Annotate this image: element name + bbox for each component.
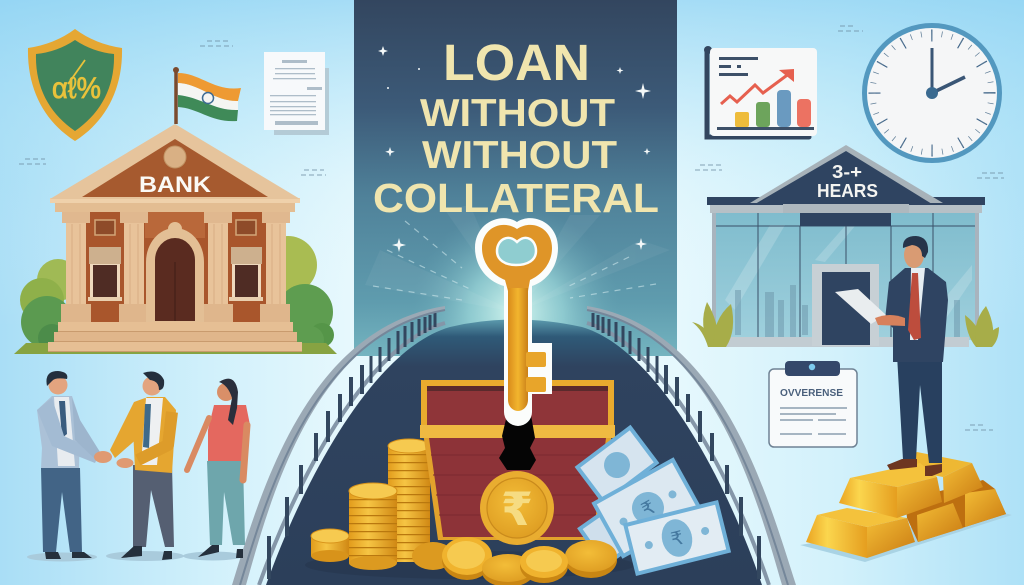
key bow — [482, 225, 552, 291]
trees — [14, 236, 337, 354]
base — [722, 337, 969, 347]
building label: 3-+ — [832, 162, 862, 182]
rupee coin — [480, 471, 554, 545]
facade — [75, 210, 275, 322]
cornice — [50, 198, 300, 203]
rupee coin: ₹ — [501, 482, 533, 536]
small coin stack — [349, 483, 397, 570]
keyhole crack — [499, 415, 536, 470]
jacket — [885, 268, 948, 362]
bottom right bar — [965, 489, 1006, 527]
hands — [875, 315, 905, 326]
trend arrow — [721, 73, 790, 104]
icon: flag — [173, 67, 241, 124]
title: WITHOUT — [420, 92, 615, 135]
icon: clock — [864, 26, 1000, 160]
dark gaps between bars — [905, 480, 1006, 542]
title — [373, 34, 659, 221]
front top bar — [850, 463, 937, 487]
clasped hands — [94, 451, 112, 463]
bottom middle bar — [917, 503, 963, 542]
road — [266, 320, 762, 585]
man with document — [835, 236, 948, 476]
icon: shield — [28, 29, 122, 141]
woman — [183, 379, 250, 560]
title: LOAN — [443, 34, 590, 91]
bridge — [232, 306, 796, 585]
title: COLLATERAL — [373, 175, 659, 221]
coin shadow — [305, 551, 635, 579]
columns — [61, 212, 290, 322]
front coins — [412, 537, 617, 585]
icon: shield: αℓ% — [52, 72, 101, 105]
pediment — [50, 124, 300, 199]
treasure chest — [305, 380, 729, 585]
people: handshake group — [27, 371, 250, 562]
key teeth — [526, 352, 546, 367]
chest back — [421, 380, 614, 426]
bank building — [14, 124, 337, 354]
title: WITHOUT — [422, 134, 617, 177]
icon: document — [264, 52, 329, 135]
single coin pile — [311, 529, 349, 562]
steps — [58, 322, 293, 332]
document — [835, 289, 886, 324]
windows — [88, 220, 263, 301]
key outline — [504, 270, 552, 426]
man in light blue jacket — [27, 371, 100, 562]
bank label: BANK — [139, 172, 211, 197]
door — [146, 228, 204, 322]
key shaft — [508, 288, 528, 411]
icon: golden key — [475, 218, 558, 426]
stars — [378, 46, 651, 252]
chest front — [423, 432, 612, 540]
icon: checklist clipboard: OVVERENSE — [780, 387, 843, 399]
icon: checklist clipboard — [769, 361, 857, 447]
bars — [735, 112, 749, 127]
glass front — [713, 212, 978, 340]
roof — [707, 197, 985, 205]
large coin stack — [388, 439, 430, 562]
back top bar — [897, 452, 972, 477]
office building — [707, 145, 985, 347]
icon: chart board — [704, 46, 817, 137]
gold bars — [800, 452, 1012, 562]
head — [904, 242, 924, 268]
legs — [897, 355, 942, 463]
door — [812, 264, 879, 346]
office building: HEARS — [817, 181, 878, 201]
bottom left bar — [806, 515, 867, 558]
man in yellow jacket — [106, 372, 184, 561]
banknotes — [577, 428, 729, 574]
panel: central dark title panel — [354, 0, 677, 356]
banknotes: ₹ — [669, 527, 686, 551]
banknotes: ₹ — [638, 496, 659, 521]
small decorative dashes — [19, 26, 1004, 430]
plants — [692, 302, 999, 347]
